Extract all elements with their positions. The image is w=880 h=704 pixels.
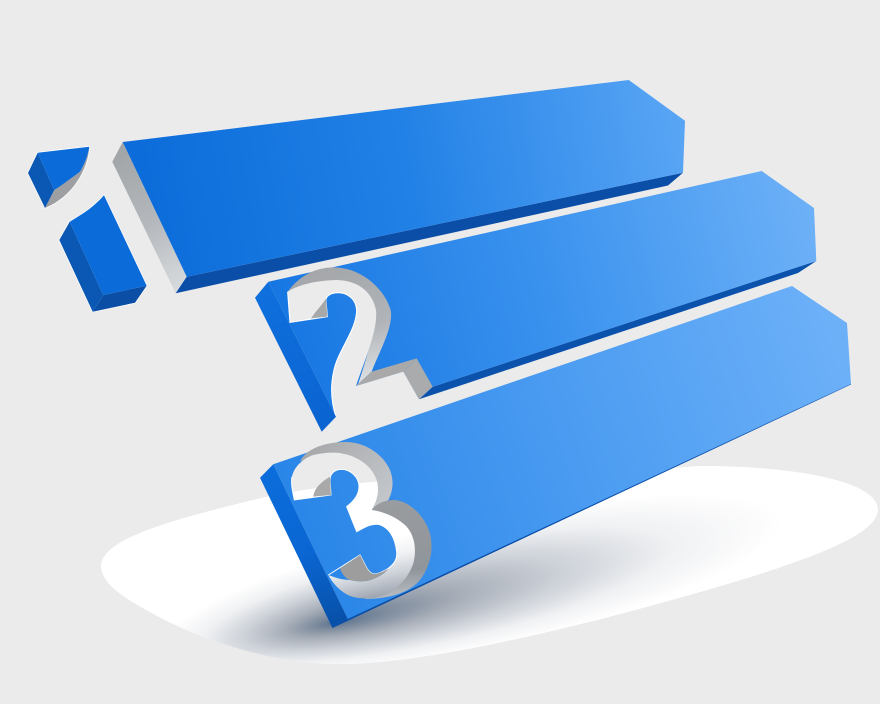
- numeral 3 white outline: [292, 469, 397, 575]
- numeral 2 white outline: [288, 292, 357, 417]
- banner 2 bottom edge: [419, 261, 816, 399]
- banner 1 left wall: [112, 142, 187, 293]
- numeral 2 hook inner wall: [311, 298, 327, 318]
- white ground blob with shadow: [100, 460, 880, 670]
- numeral 1 top piece: [28, 147, 89, 208]
- banner 2 left wall: [255, 282, 336, 432]
- banner 1: [112, 80, 685, 293]
- banner 3 left wall: [260, 464, 348, 628]
- numeral 3 lower hook inner wall: [340, 555, 388, 581]
- numeral 3 upper hook inner wall: [313, 477, 331, 497]
- numeral 1: [28, 147, 147, 312]
- numeral 1 lower piece: [59, 195, 147, 312]
- banner 1 face: [123, 80, 685, 277]
- banner 3: [260, 286, 851, 628]
- banner 2: [255, 171, 816, 432]
- banner 1 bottom edge: [176, 173, 683, 293]
- banner 2 face with cut-out numeral 2: [268, 171, 816, 417]
- banner 3 bottom edge: [332, 384, 851, 628]
- banner 3 face with cut-out numeral 3: [273, 286, 851, 619]
